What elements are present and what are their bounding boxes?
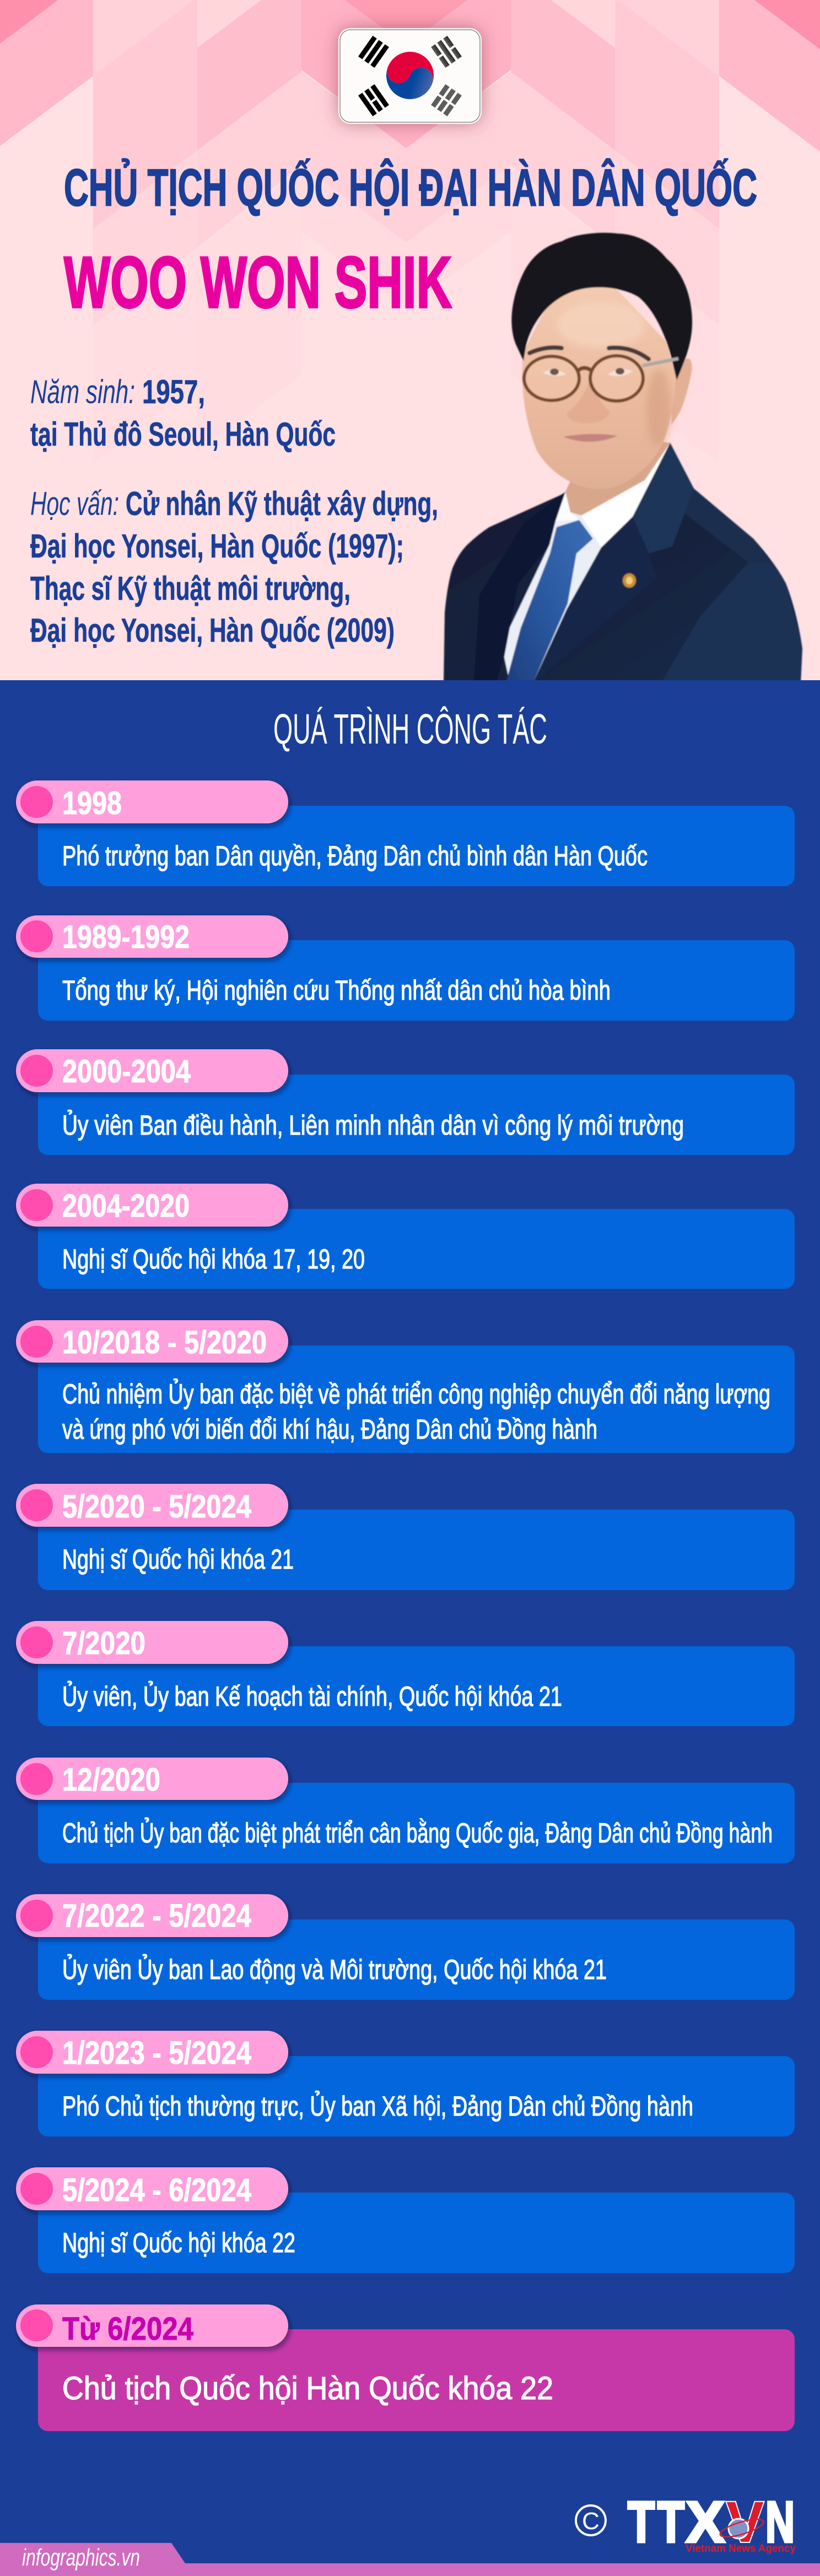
footer band — [0, 2543, 820, 2576]
logo: TTXVN Vietnam News Agency: V — [726, 2490, 764, 2555]
entry 7/2022 - 5/2024 — [16, 1894, 795, 2000]
entry 5/2024 - 6/2024: Nghị sĩ Quốc hội khóa 22 — [62, 2227, 295, 2258]
entry 7/2020: 7/2020 — [62, 1625, 145, 1661]
entry 5/2020 - 5/2024: 5/2020 - 5/2024 — [62, 1489, 251, 1525]
panel: header — [0, 0, 820, 683]
portrait of Woo Won Shik — [444, 233, 802, 683]
entry from 6/2024 (highlighted): Chủ tịch Quốc hội Hàn Quốc khóa 22 — [62, 2371, 553, 2406]
entry 1998: Phó trưởng ban Dân quyền, Đảng Dân chủ bình dân Hàn Quốc — [62, 840, 648, 871]
text block: education: Đại học Yonsei, Hàn Quốc (2009) — [30, 612, 395, 649]
entry 1/2023 - 5/2024 — [16, 2031, 795, 2136]
entry 5/2020 - 5/2024 — [16, 1484, 795, 1590]
logo: TTXVN Vietnam News Agency: N — [765, 2490, 795, 2555]
entry 7/2022 - 5/2024: Ủy viên Ủy ban Lao động và Môi trường, Quốc hội khóa 21 — [62, 1954, 607, 1985]
text block: education: Thạc sĩ Kỹ thuật môi trường, — [30, 570, 350, 607]
text block: education: Đại học Yonsei, Hàn Quốc (1997); — [30, 528, 404, 565]
text block: education: Học vấn: — [30, 485, 119, 522]
entry from 6/2024 (highlighted) — [16, 2304, 795, 2431]
entry 2004-2020: 2004-2020 — [62, 1188, 190, 1224]
source: infographics.vn: infographics.vn — [22, 2544, 140, 2571]
copyright symbol — [576, 2506, 606, 2535]
entry 1998 — [16, 780, 795, 886]
entry 1/2023 - 5/2024: 1/2023 - 5/2024 — [62, 2035, 251, 2071]
flag of South Korea — [338, 28, 482, 124]
logo: TTXVN Vietnam News Agency — [628, 2490, 796, 2555]
entry 5/2020 - 5/2024: Nghị sĩ Quốc hội khóa 21 — [62, 1544, 294, 1575]
entry 5/2024 - 6/2024 — [16, 2167, 795, 2273]
entry 12/2020 — [16, 1758, 795, 1863]
entry 2004-2020 — [16, 1184, 795, 1289]
logo: TTXVN Vietnam News Agency: T — [657, 2490, 684, 2555]
text block: education — [30, 485, 438, 649]
entry 10/2018 - 5/2020 — [16, 1320, 795, 1453]
logo: TTXVN Vietnam News Agency: T — [628, 2490, 655, 2555]
text block: birth: tại Thủ đô Seoul, Hàn Quốc — [30, 416, 336, 453]
entry 7/2022 - 5/2024: 7/2022 - 5/2024 — [62, 1898, 251, 1934]
entry 1989-1992: 1989-1992 — [62, 919, 190, 955]
entry 1989-1992 — [16, 915, 795, 1021]
logo: TTXVN Vietnam News Agency: Vietnam News Agency — [686, 2543, 796, 2555]
entry 2004-2020: Nghị sĩ Quốc hội khóa 17, 19, 20 — [62, 1244, 365, 1275]
panel: career timeline background — [0, 680, 820, 2576]
entry 10/2018 - 5/2020: 10/2018 - 5/2020 — [62, 1325, 267, 1360]
entry 7/2020 — [16, 1621, 795, 1726]
text block: birth — [30, 373, 336, 453]
entry 1998: 1998 — [62, 785, 122, 821]
entry 5/2024 - 6/2024: 5/2024 - 6/2024 — [62, 2172, 251, 2208]
copyright symbol: C — [582, 2508, 600, 2535]
entry 10/2018 - 5/2020: và ứng phó với biến đổi khí hậu, Đảng Dân chủ Đồng hành — [62, 1414, 597, 1445]
entry 2000-2004 — [16, 1049, 795, 1155]
text block: education: Cử nhân Kỹ thuật xây dựng, — [126, 485, 438, 522]
text block: birth: Năm sinh: — [30, 373, 135, 410]
name: WOO WON SHIK — [64, 242, 452, 323]
text block: birth: 1957, — [142, 373, 205, 410]
entry 12/2020: 12/2020 — [62, 1762, 160, 1798]
entry 2000-2004: 2000-2004 — [62, 1054, 191, 1089]
background: geometric pink pattern — [0, 0, 820, 463]
entry 1989-1992: Tổng thư ký, Hội nghiên cứu Thống nhất dân chủ hòa bình — [62, 975, 611, 1006]
logo: TTXVN Vietnam News Agency: X — [686, 2490, 725, 2555]
entry from 6/2024 (highlighted): Từ 6/2024 — [62, 2311, 193, 2347]
heading: career: QUÁ TRÌNH CÔNG TÁC — [273, 706, 547, 753]
entry 7/2020: Ủy viên, Ủy ban Kế hoạch tài chính, Quốc hội khóa 21 — [62, 1680, 562, 1712]
